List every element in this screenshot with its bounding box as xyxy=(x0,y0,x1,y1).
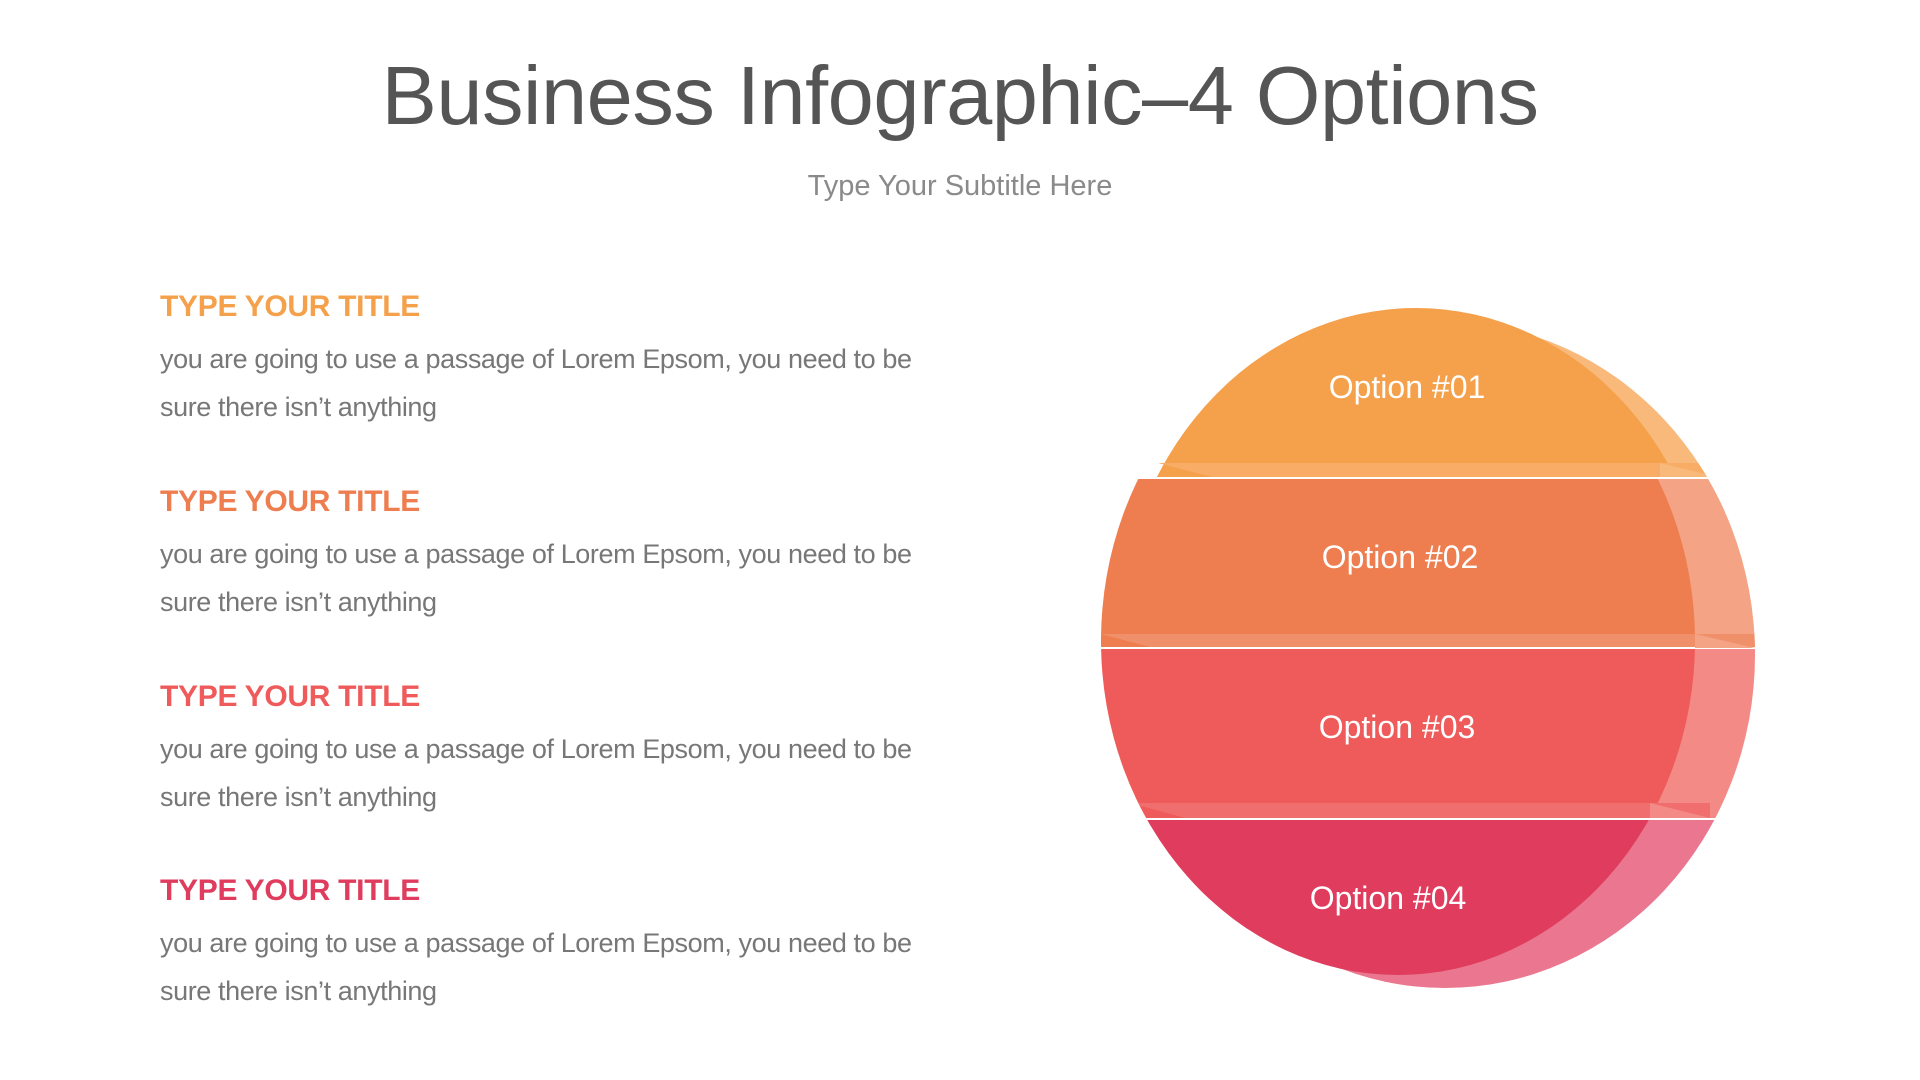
body 2: sure there isn’t anything xyxy=(160,587,437,617)
body 3: you are going to use a passage of Lorem Epsom, you need to be xyxy=(160,734,912,764)
body 3 xyxy=(160,734,912,812)
text block: option 4 xyxy=(160,874,912,1006)
label 2: Option #02 xyxy=(1322,539,1478,575)
title: Business Infographic–4 Options xyxy=(382,49,1538,142)
heading 3: TYPE YOUR TITLE xyxy=(160,680,420,713)
body 4: sure there isn’t anything xyxy=(160,976,437,1006)
band 1 xyxy=(1157,308,1707,477)
text block: option 3 xyxy=(160,680,912,812)
subtitle: Type Your Subtitle Here xyxy=(808,170,1112,202)
sphere chart xyxy=(1101,308,1755,988)
body 4 xyxy=(160,928,912,1006)
band 4 xyxy=(1147,820,1714,988)
text block: option 2 xyxy=(160,485,912,617)
body 2 xyxy=(160,539,912,617)
heading 4: TYPE YOUR TITLE xyxy=(160,874,420,907)
body 1: sure there isn’t anything xyxy=(160,392,437,422)
label 3: Option #03 xyxy=(1319,709,1475,745)
band 2 xyxy=(1101,479,1755,648)
body 3: sure there isn’t anything xyxy=(160,782,437,812)
body 4: you are going to use a passage of Lorem Epsom, you need to be xyxy=(160,928,912,958)
label 4: Option #04 xyxy=(1310,880,1466,916)
band 3 xyxy=(1101,649,1755,818)
body 1: you are going to use a passage of Lorem Epsom, you need to be xyxy=(160,344,912,374)
heading 1: TYPE YOUR TITLE xyxy=(160,290,420,323)
body 1 xyxy=(160,344,912,422)
text block: option 1 xyxy=(160,290,912,422)
label 1: Option #01 xyxy=(1329,369,1485,405)
body 2: you are going to use a passage of Lorem Epsom, you need to be xyxy=(160,539,912,569)
heading 2: TYPE YOUR TITLE xyxy=(160,485,420,518)
